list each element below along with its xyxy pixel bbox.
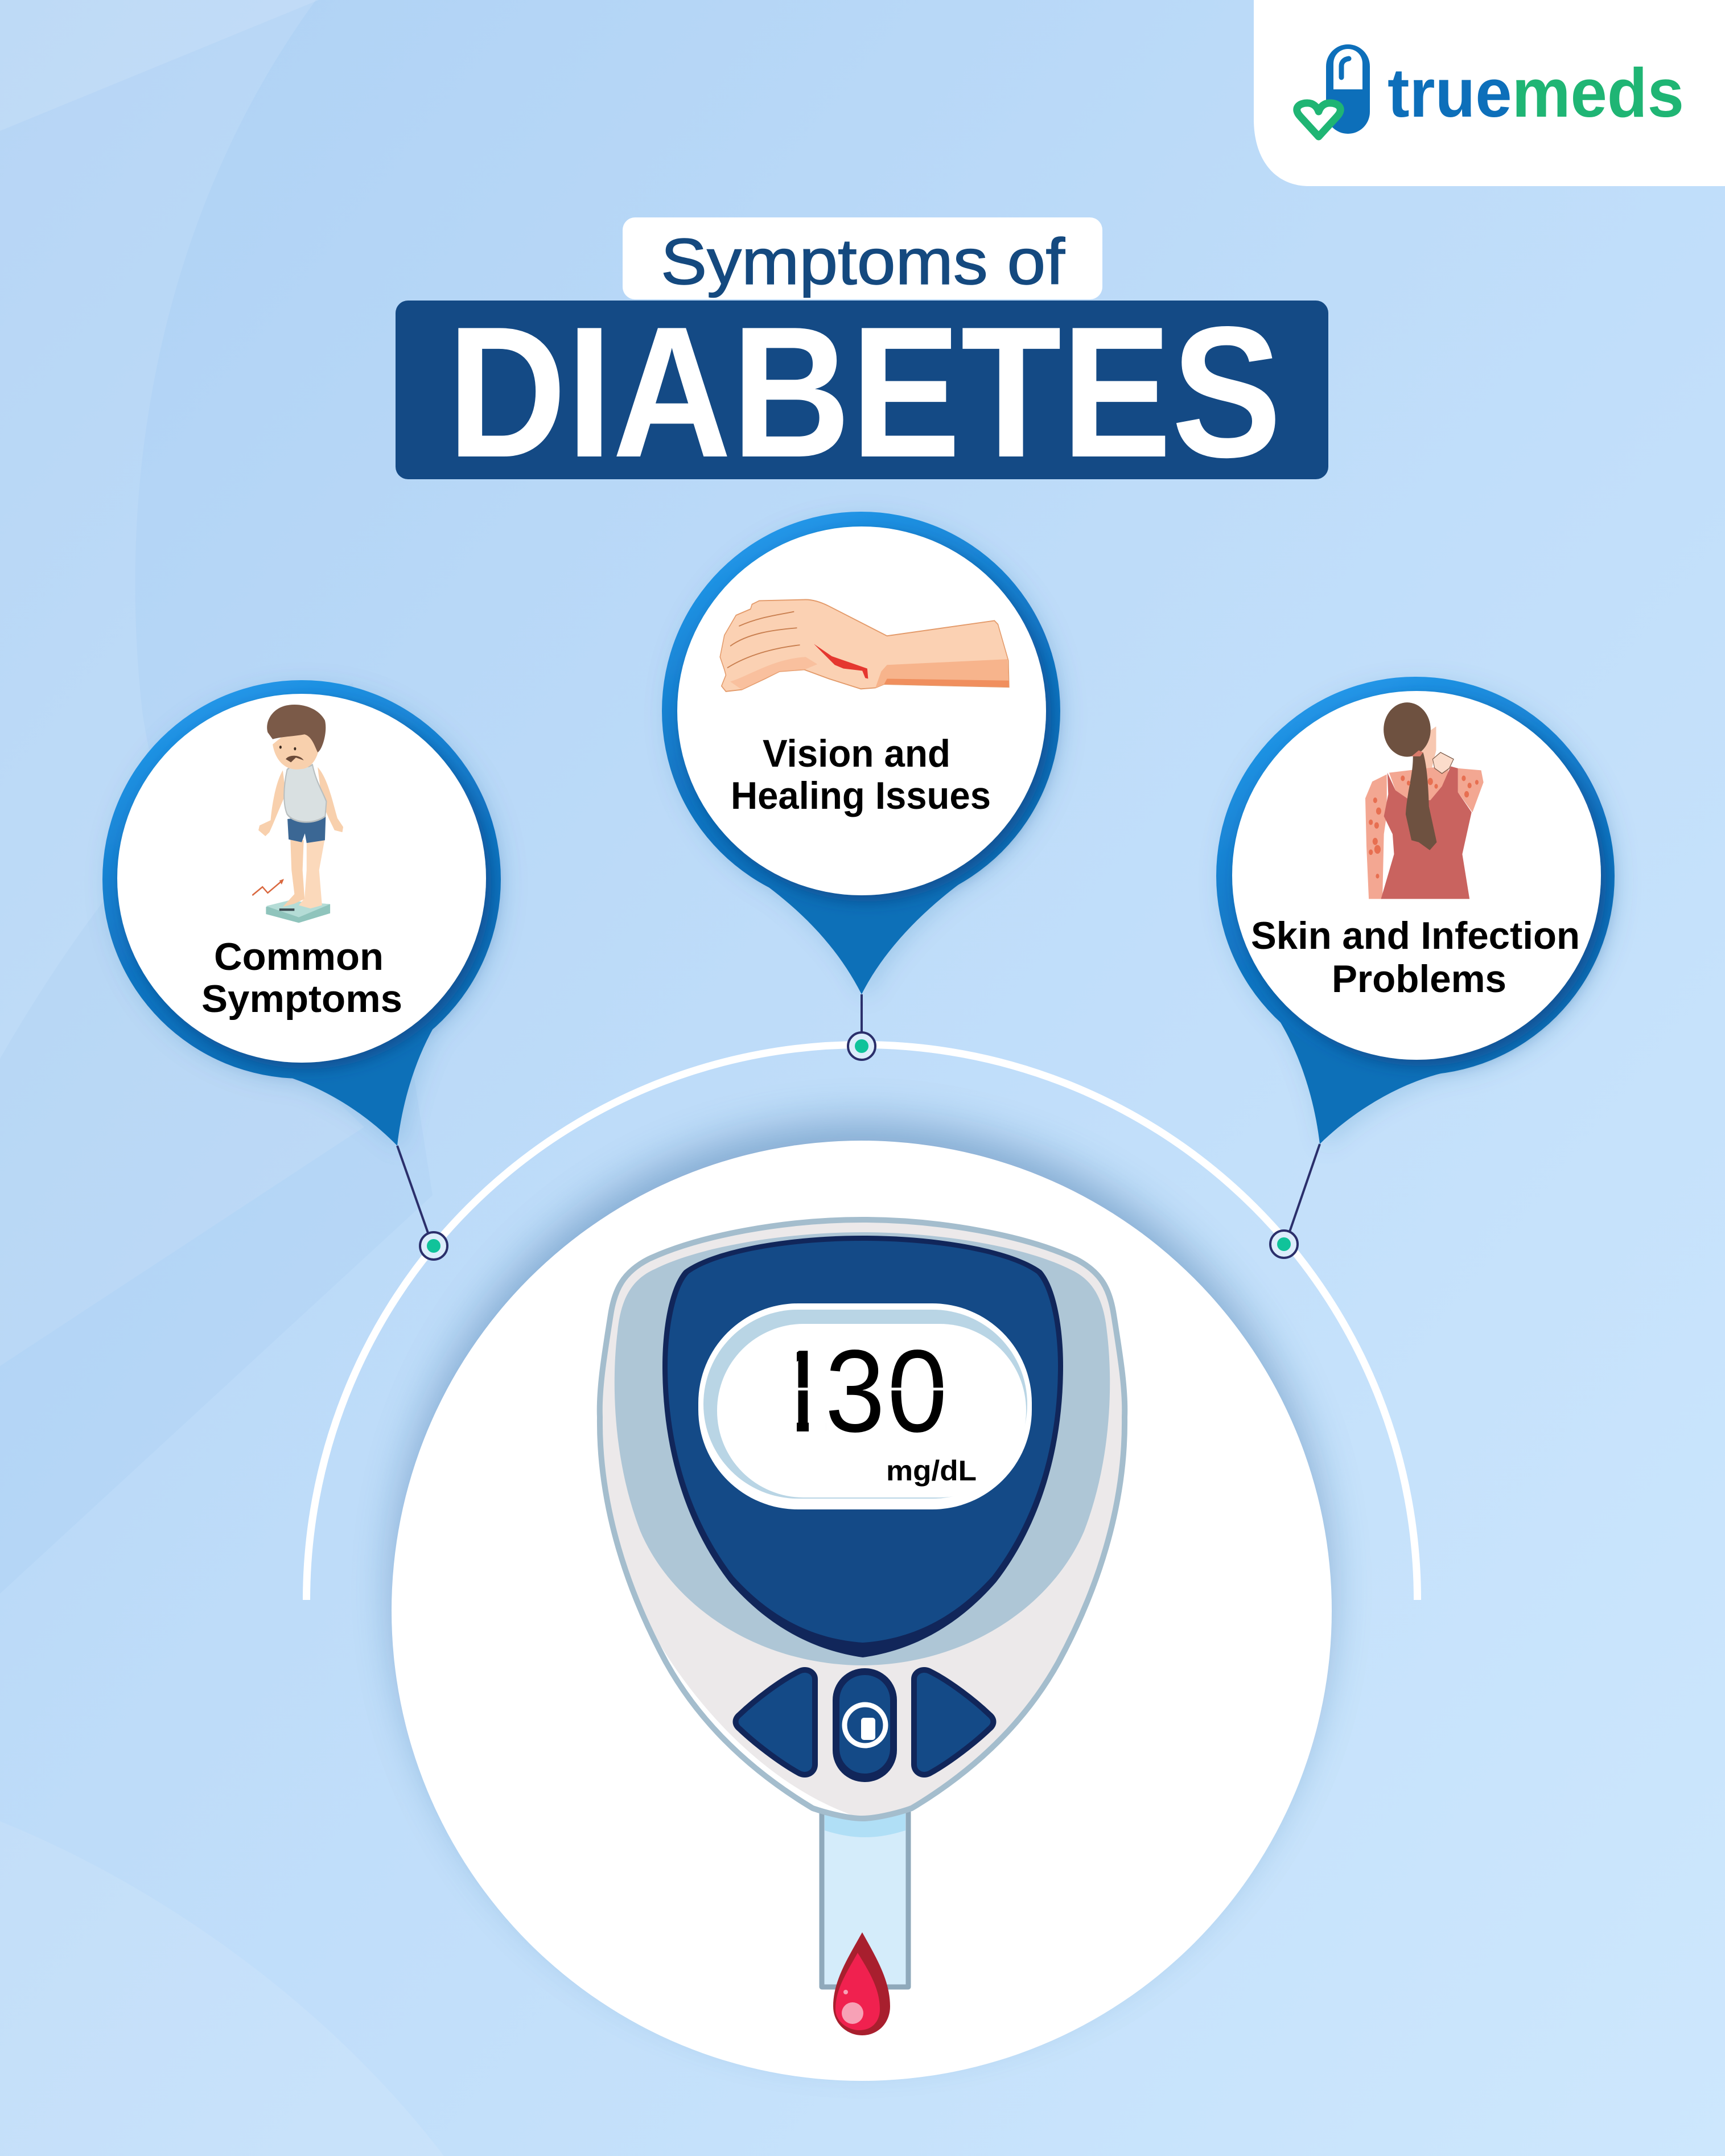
pin body right: [1216, 677, 1615, 1144]
label: Common Symptoms: Common: [214, 935, 384, 978]
pin: common symptoms: [102, 680, 501, 1233]
test strip: [822, 1804, 908, 1987]
logo card: [1254, 0, 1725, 186]
title: Symptoms of: [623, 217, 1102, 299]
label: Vision and Healing Issues: Vision and: [763, 732, 950, 775]
body outline: [600, 1220, 1125, 1818]
pin: vision and healing issues: [662, 512, 1060, 1033]
label: Skin and Infection Problems: Problems: [1332, 957, 1506, 1001]
connector line middle: [861, 994, 863, 1033]
node right: [1270, 1231, 1298, 1258]
right button: [914, 1670, 994, 1775]
white arc connector: [306, 1044, 1417, 1600]
unit label: mg/dL: [886, 1455, 977, 1487]
connector line left: [397, 1146, 428, 1233]
face panel: [668, 1241, 1058, 1643]
title: DIABETES: DIABETES: [447, 287, 1282, 496]
connector line right: [1290, 1144, 1320, 1232]
node middle: [848, 1032, 875, 1060]
logo icon: capsule and heart: [1297, 44, 1370, 137]
meter body: [600, 1220, 1125, 1818]
white circle backdrop: [392, 1122, 1332, 2081]
glucose meter: [600, 1220, 1127, 1827]
body shade right: [909, 1803, 914, 1806]
icon: man on weighing scale: [252, 705, 343, 923]
left button: [735, 1670, 815, 1775]
body highlight left: [660, 1645, 851, 1815]
title: Symptoms of: Symptoms of: [661, 226, 1065, 298]
reading 130: 0: [887, 1326, 948, 1456]
logo wordmark: truemeds: [1388, 54, 1684, 131]
reading 130: 1: [771, 1326, 831, 1456]
pin body left: [102, 680, 501, 1146]
face outline: [662, 1236, 1063, 1657]
pin body middle: [662, 512, 1060, 994]
icon: wounded hand: [720, 599, 1009, 692]
icon: woman with skin rash: [1365, 702, 1484, 899]
display screen: [698, 1303, 1032, 1509]
face band: [615, 1232, 1110, 1665]
label: Vision and Healing Issues: Healing Issues: [731, 774, 991, 817]
pin: skin and infection problems: [1216, 677, 1615, 1232]
reading 130: 3: [825, 1326, 885, 1456]
label: Skin and Infection Problems: Skin and Infection: [1251, 914, 1580, 957]
label: Common Symptoms: Symptoms: [201, 977, 402, 1021]
blood drop: [833, 1932, 890, 2035]
center button: [833, 1668, 897, 1782]
node left: [420, 1232, 447, 1260]
